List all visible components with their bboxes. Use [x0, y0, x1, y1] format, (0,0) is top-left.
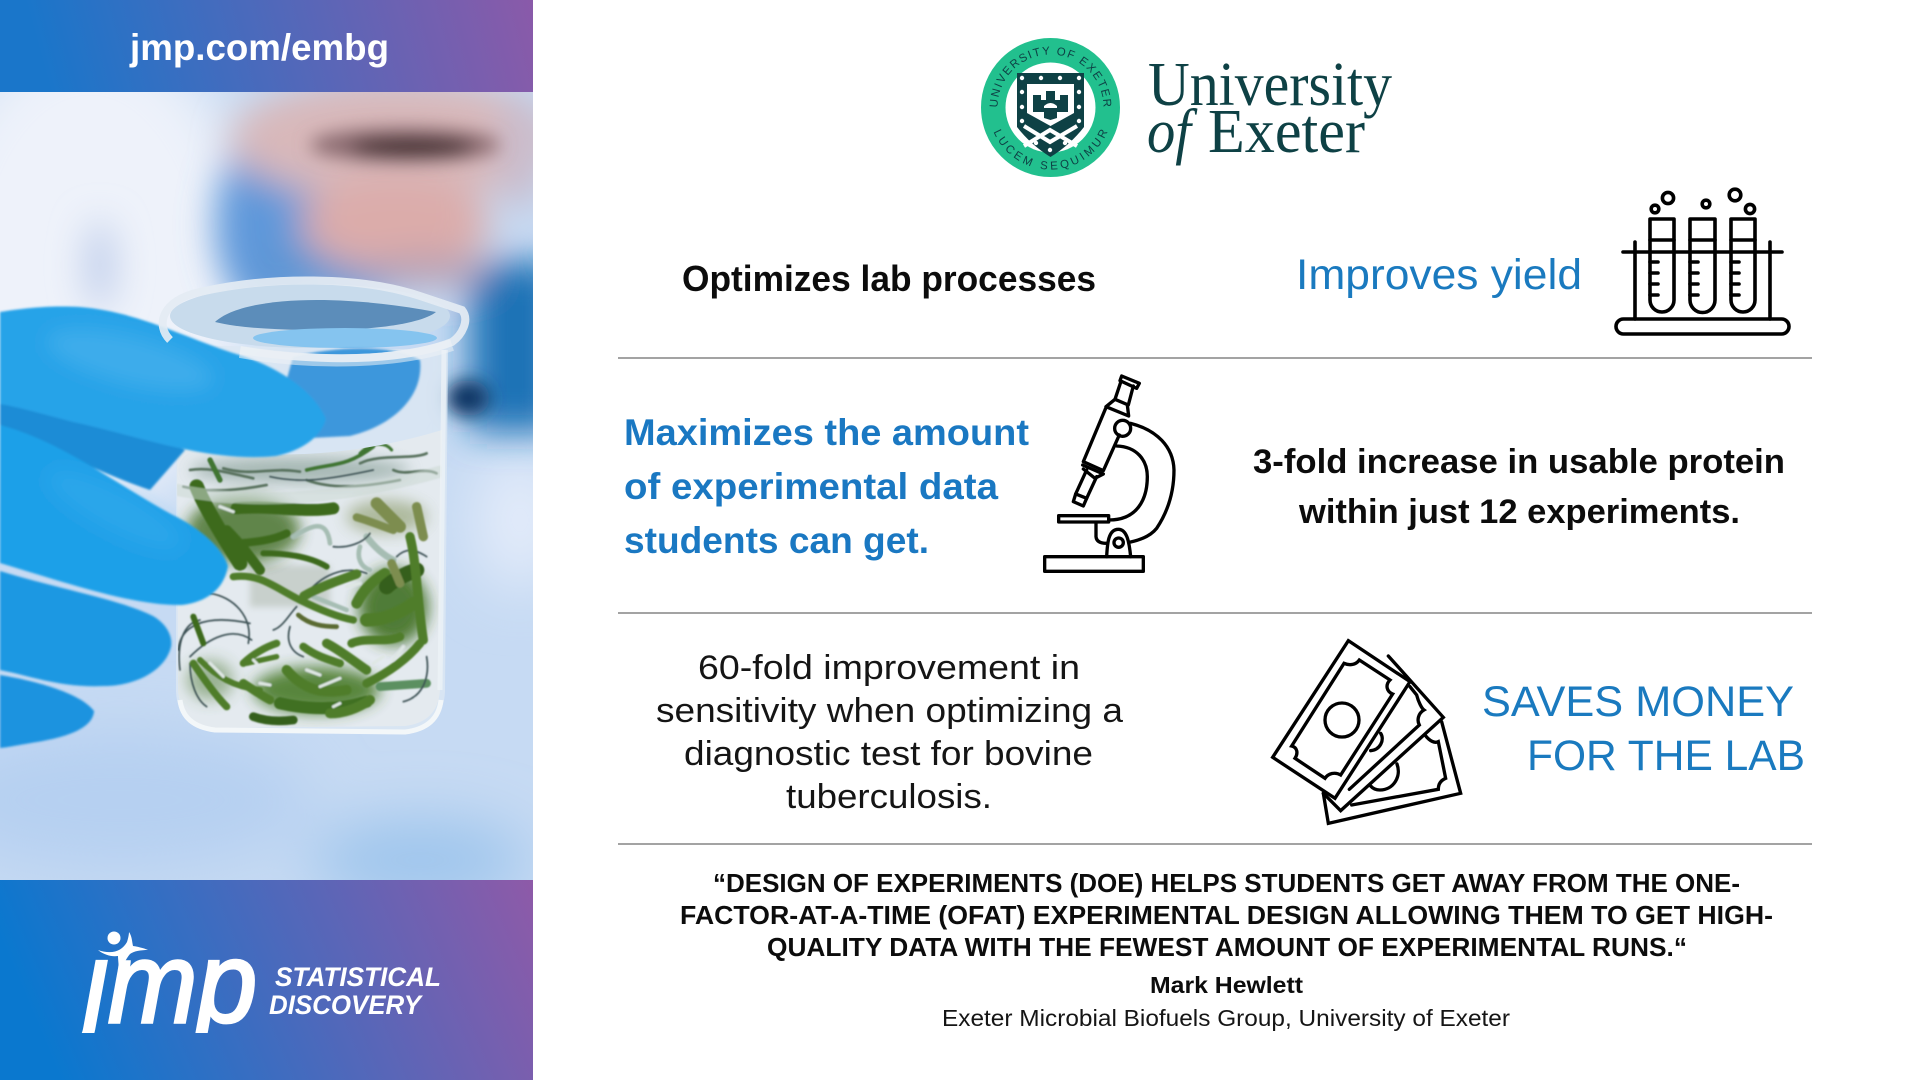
divider two [618, 612, 1812, 614]
row 2: maximizes data: Maximizes the amount [624, 412, 1029, 453]
row 2: maximizes data: of experimental data [624, 466, 998, 507]
divider three [618, 843, 1812, 845]
wordmark [1147, 51, 1392, 166]
algae strands [178, 444, 440, 721]
tagline [269, 962, 441, 1020]
top banner [0, 0, 533, 92]
wordmark: University [1148, 51, 1392, 119]
University of Exeter logo [981, 38, 1392, 177]
beaker [170, 284, 450, 732]
gloved fingers [0, 307, 420, 748]
row 3: 60-fold improvement: 60-fold improvement in [698, 649, 1080, 687]
row 2: maximizes data: students can get. [624, 520, 929, 561]
blurred lab background with face and coat [0, 92, 533, 880]
quote block [680, 868, 1773, 962]
row 2: maximizes data [624, 412, 1029, 561]
tagline: DISCOVERY [269, 990, 424, 1020]
crest [981, 38, 1120, 177]
wordmark: of [1147, 98, 1198, 166]
quote block: QUALITY DATA WITH THE FEWEST AMOUNT OF EXPERIMENTAL RUNS.“ [767, 932, 1687, 962]
divider one [618, 357, 1812, 359]
row 1: optimizes lab processes: Optimizes lab processes [682, 258, 1096, 299]
row 3: saves money: SAVES MONEY [1482, 678, 1794, 726]
row 2: 3-fold increase: within just 12 experiments. [1298, 493, 1740, 531]
quote block: FACTOR-AT-A-TIME (OFAT) EXPERIMENTAL DESIGN ALLOWING THEM TO GET HIGH- [680, 900, 1773, 930]
photo: gloved hand holding beaker with green algae [0, 92, 533, 880]
row 2: 3-fold increase [1253, 443, 1785, 531]
row 1: improves yield: Improves yield [1296, 251, 1582, 299]
attribution affiliation: Exeter Microbial Biofuels Group, University of Exeter [942, 1005, 1510, 1031]
attribution name: Mark Hewlett [1150, 972, 1303, 998]
bottom banner with JMP logo [0, 880, 533, 1080]
row 3: saves money: FOR THE LAB [1527, 732, 1805, 780]
icon: microscope [1045, 376, 1174, 571]
icon: test tubes [1616, 189, 1789, 334]
JMP wordmark: jmp [72, 920, 257, 1047]
tagline: STATISTICAL [275, 962, 441, 992]
crest: UNIVERSITY OF EXETER [990, 46, 1112, 107]
crest: LUCEM SEQUIMUR [994, 129, 1108, 170]
beaker rim glass [163, 280, 465, 732]
row 3: 60-fold improvement: tuberculosis. [786, 778, 992, 816]
banner url text: jmp.com/embg [129, 27, 389, 68]
icon: banknotes [1273, 641, 1461, 823]
row 3: 60-fold improvement: sensitivity when optimizing a [656, 692, 1123, 730]
wordmark: Exeter [1208, 98, 1365, 166]
row 3: 60-fold improvement: diagnostic test for bovine [684, 735, 1093, 773]
quote block: “DESIGN OF EXPERIMENTS (DOE) HELPS STUDENTS GET AWAY FROM THE ONE- [713, 868, 1740, 898]
row 2: 3-fold increase: 3-fold increase in usable protein [1253, 443, 1785, 481]
row 3: 60-fold improvement [656, 649, 1123, 816]
row 3: saves money [1482, 678, 1805, 780]
